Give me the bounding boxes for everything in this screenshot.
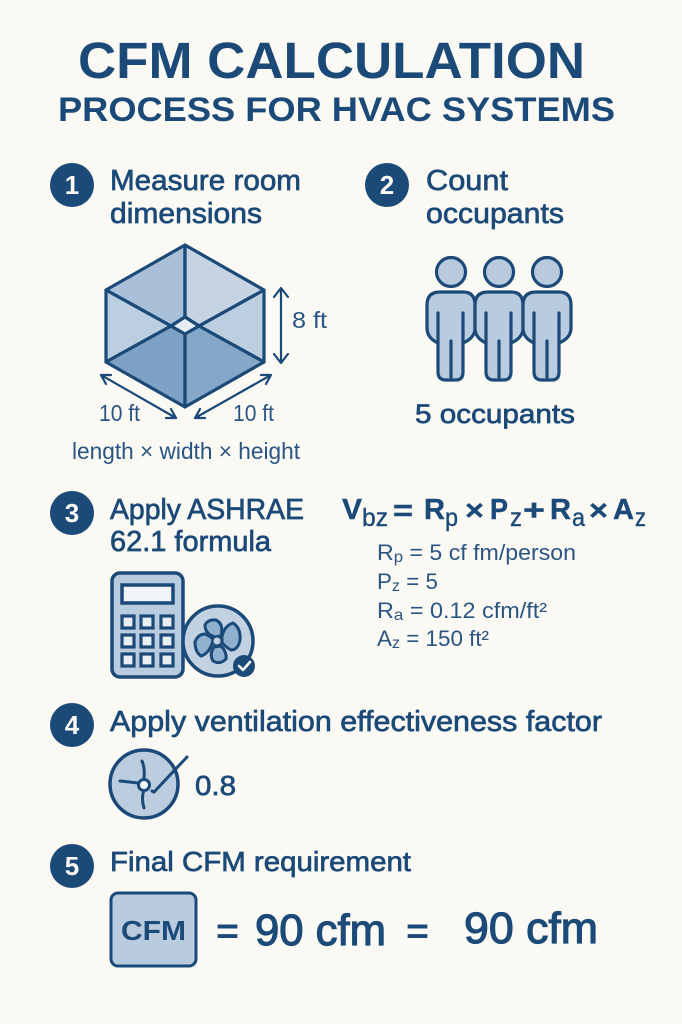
icon: fan gauge: [110, 750, 187, 818]
icon: three occupants: [427, 258, 571, 380]
variable definitions: z: [392, 635, 400, 652]
icon: fan with check: [183, 606, 255, 677]
variable definitions: [377, 540, 576, 652]
width arrow and label: 10 ft: [233, 400, 275, 426]
variable definitions: a: [394, 607, 403, 624]
step 1 heading: Measure room: [110, 165, 301, 197]
equation: +: [523, 495, 545, 527]
step 4 heading: Apply ventilation effectiveness factor: [110, 706, 602, 738]
occupants label: 5 occupants: [415, 399, 575, 429]
step 3 badge: [50, 491, 94, 535]
variable definitions: = 150 ft²: [400, 626, 489, 651]
result equation: 90 cfm: [464, 904, 598, 953]
step 3 badge: 3: [65, 498, 79, 528]
result equation: [216, 904, 598, 955]
equation: V: [342, 494, 363, 526]
step 3 heading: [110, 494, 304, 558]
icon: calculator: [112, 573, 183, 677]
length arrow and label: [99, 375, 176, 426]
variable definitions: = 5 cf fm/person: [403, 540, 576, 565]
variable definitions: = 5: [400, 569, 438, 594]
length arrow and label: 10 ft: [99, 400, 141, 426]
effectiveness value: 0.8: [195, 770, 236, 801]
step 2 heading: Count: [426, 165, 508, 197]
step 5 badge: [50, 844, 94, 888]
variable definitions: A: [377, 626, 392, 651]
title: [58, 32, 615, 129]
equation: P: [490, 494, 508, 526]
equation: z: [510, 504, 522, 532]
step 3 heading: 62.1 formula: [110, 526, 272, 558]
equation: =: [393, 495, 413, 527]
equation: [342, 494, 646, 532]
variable definitions: = 0.12 cfm/ft²: [403, 598, 547, 623]
width arrow and label: [195, 375, 275, 426]
equation: A: [613, 494, 634, 526]
variable definitions: P: [377, 569, 392, 594]
equation: ×: [589, 495, 608, 527]
step 1 badge: 1: [65, 170, 79, 200]
result equation: =: [216, 910, 239, 951]
step 1 heading: dimensions: [110, 198, 262, 230]
equation: z: [635, 504, 646, 532]
icon: room cube: [106, 245, 264, 407]
equation: p: [445, 504, 458, 532]
variable definitions: R: [377, 540, 393, 565]
step 5 heading: Final CFM requirement: [110, 846, 411, 877]
result equation: =: [406, 910, 429, 951]
step 4 badge: 4: [65, 710, 80, 740]
variable definitions: z: [392, 578, 400, 595]
equation: ×: [465, 495, 484, 527]
step 1 badge: [50, 163, 94, 207]
step 2 heading: [426, 165, 564, 230]
equation: R: [424, 494, 445, 526]
title: CFM CALCULATION: [78, 32, 585, 89]
step 3 heading: Apply ASHRAE: [110, 494, 304, 526]
height arrow and label: [274, 288, 328, 363]
result equation: 90 cfm: [255, 906, 386, 955]
equation: bz: [362, 504, 388, 532]
step 2 badge: 2: [380, 170, 394, 200]
title: PROCESS FOR HVAC SYSTEMS: [58, 91, 615, 129]
equation: R: [550, 494, 571, 526]
step 5 badge: 5: [65, 851, 79, 881]
height arrow and label: 8 ft: [292, 307, 328, 333]
variable definitions: p: [394, 549, 403, 566]
CFM box: [111, 893, 196, 966]
CFM box: CFM: [121, 915, 186, 946]
step 2 badge: [365, 163, 409, 207]
step 1 heading: [110, 165, 301, 230]
variable definitions: R: [377, 598, 393, 623]
equation: a: [572, 504, 585, 532]
formula caption: length × width × height: [72, 438, 301, 464]
step 2 heading: occupants: [426, 198, 564, 230]
step 4 badge: [50, 703, 94, 747]
